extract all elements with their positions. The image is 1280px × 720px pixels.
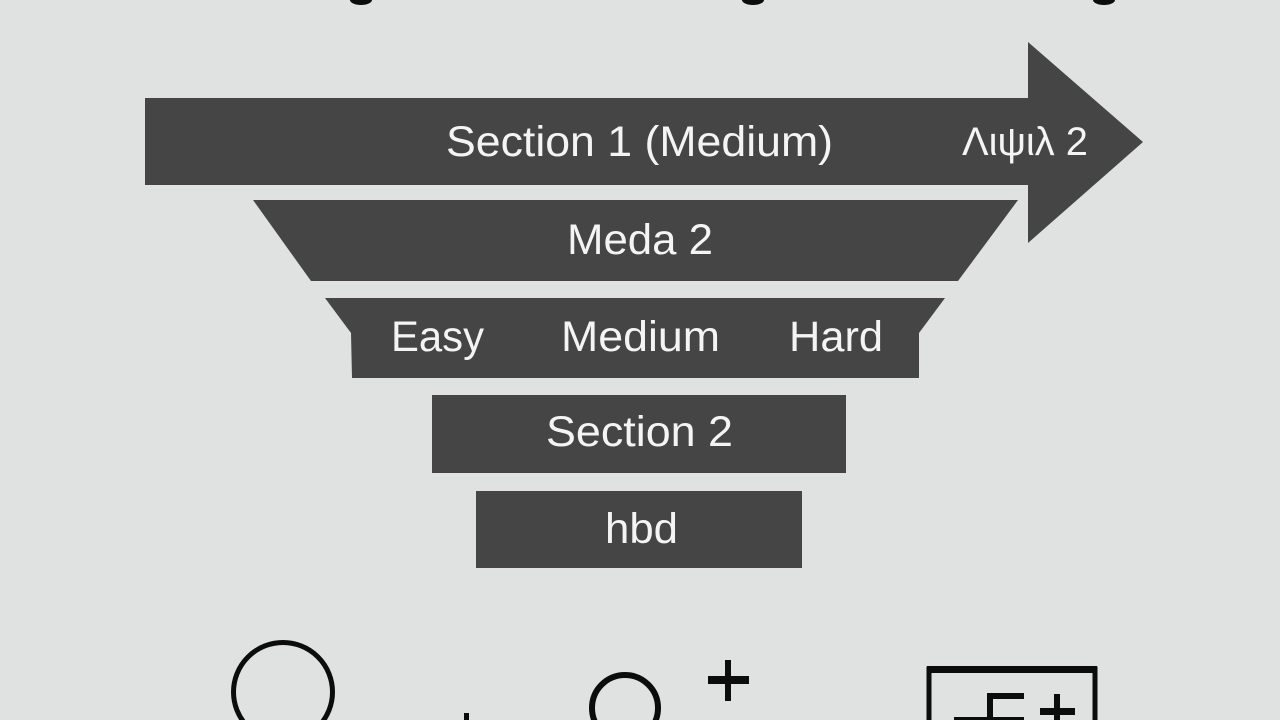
tier 4: section 2 bar: Section 2 (546, 408, 733, 456)
tier 3: difficulty bar (325, 298, 945, 378)
funnel diagram (145, 42, 1143, 568)
tier 1: arrow: Section 1 (Medium) (446, 118, 833, 166)
tier 4: section 2 bar (432, 395, 846, 473)
tier 3: difficulty bar: Hard (789, 313, 883, 361)
tier 5: bottom bar: hbd (605, 505, 678, 553)
tier 3: difficulty bar: Medium (561, 313, 720, 361)
tier 2: trapezoid (253, 200, 1018, 281)
tier 2: trapezoid: Meda 2 (567, 216, 713, 264)
icon: boxed symbol with plus (927, 666, 1097, 720)
tier 1: arrow: Λιψιλ 2 (962, 120, 1088, 164)
tier 3: difficulty bar: Easy (391, 313, 484, 361)
icon: small circle with plus (592, 660, 749, 720)
icon: large circle (234, 642, 332, 720)
title: cropped descenders at top edge (350, 0, 1115, 5)
tier 1: arrow (145, 42, 1143, 243)
tier 5: bottom bar (476, 491, 802, 568)
icon: small tick (464, 713, 469, 720)
